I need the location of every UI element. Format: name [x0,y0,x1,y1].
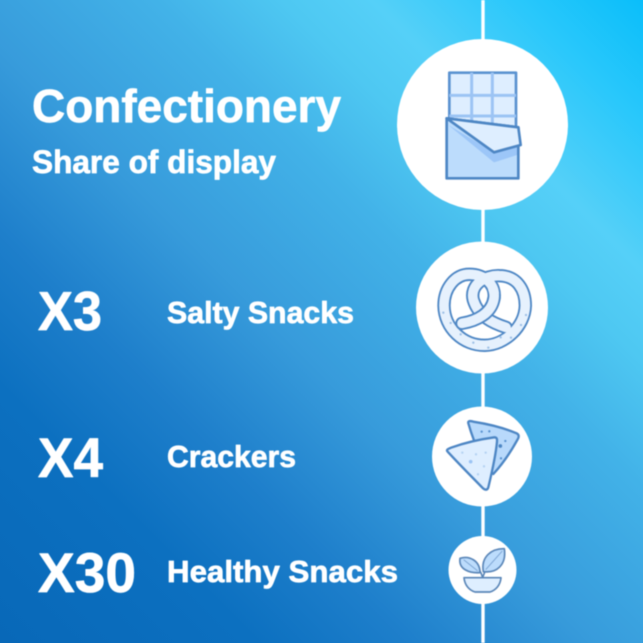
label: Healthy Snacks: Healthy Snacks [167,554,398,589]
title block [32,80,341,180]
multiplier X30: X30 [38,541,136,604]
icon: chocolate bar in circle [397,39,568,210]
multiplier X3: X3 [38,280,102,342]
label: Salty Snacks: Salty Snacks [167,295,354,330]
subtitle: Share of display: Share of display [32,144,276,180]
vertical timeline line [481,0,485,643]
icon: pretzel in circle [416,242,548,374]
title: Confectionery: Confectionery [32,80,341,132]
row: salty snacks text [38,280,354,342]
icon: tortilla chips in circle [432,406,532,506]
row: healthy snacks text [38,541,398,604]
multiplier X4: X4 [38,426,103,489]
label: Crackers: Crackers [167,439,296,474]
row: crackers text [38,426,296,489]
icon: plant in bowl in circle [448,536,516,604]
